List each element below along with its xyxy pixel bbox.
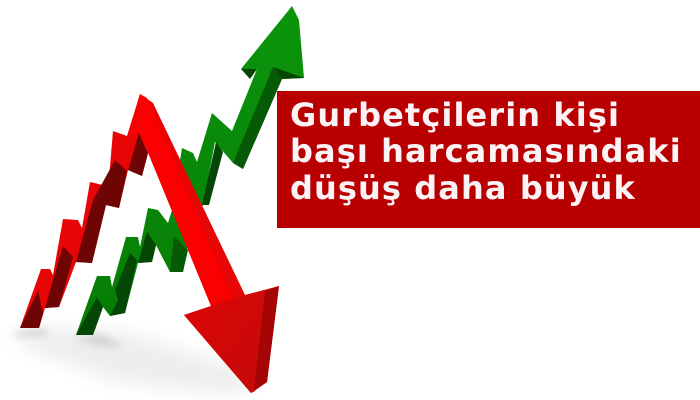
- headline line 3: düşüş daha büyük: [290, 169, 636, 207]
- green arrow dark side faces: [76, 67, 304, 335]
- red arrow falling: [20, 94, 279, 393]
- green arrow shaft side faces: [170, 67, 282, 272]
- red arrow head front face: [184, 290, 265, 393]
- red arrow head side face: [254, 286, 279, 391]
- green arrow rising: [76, 6, 304, 335]
- red arrow dark side faces: [20, 133, 148, 328]
- red arrow shaft highlight: [128, 94, 232, 306]
- green arrow silhouette: [76, 6, 304, 335]
- floor shadow: [8, 328, 250, 396]
- headline line 1: Gurbetçilerin kişi: [290, 96, 620, 134]
- headline panel: [277, 91, 700, 228]
- red arrow silhouette: [20, 94, 279, 393]
- headline line 2: başı harcamasındaki: [290, 132, 682, 170]
